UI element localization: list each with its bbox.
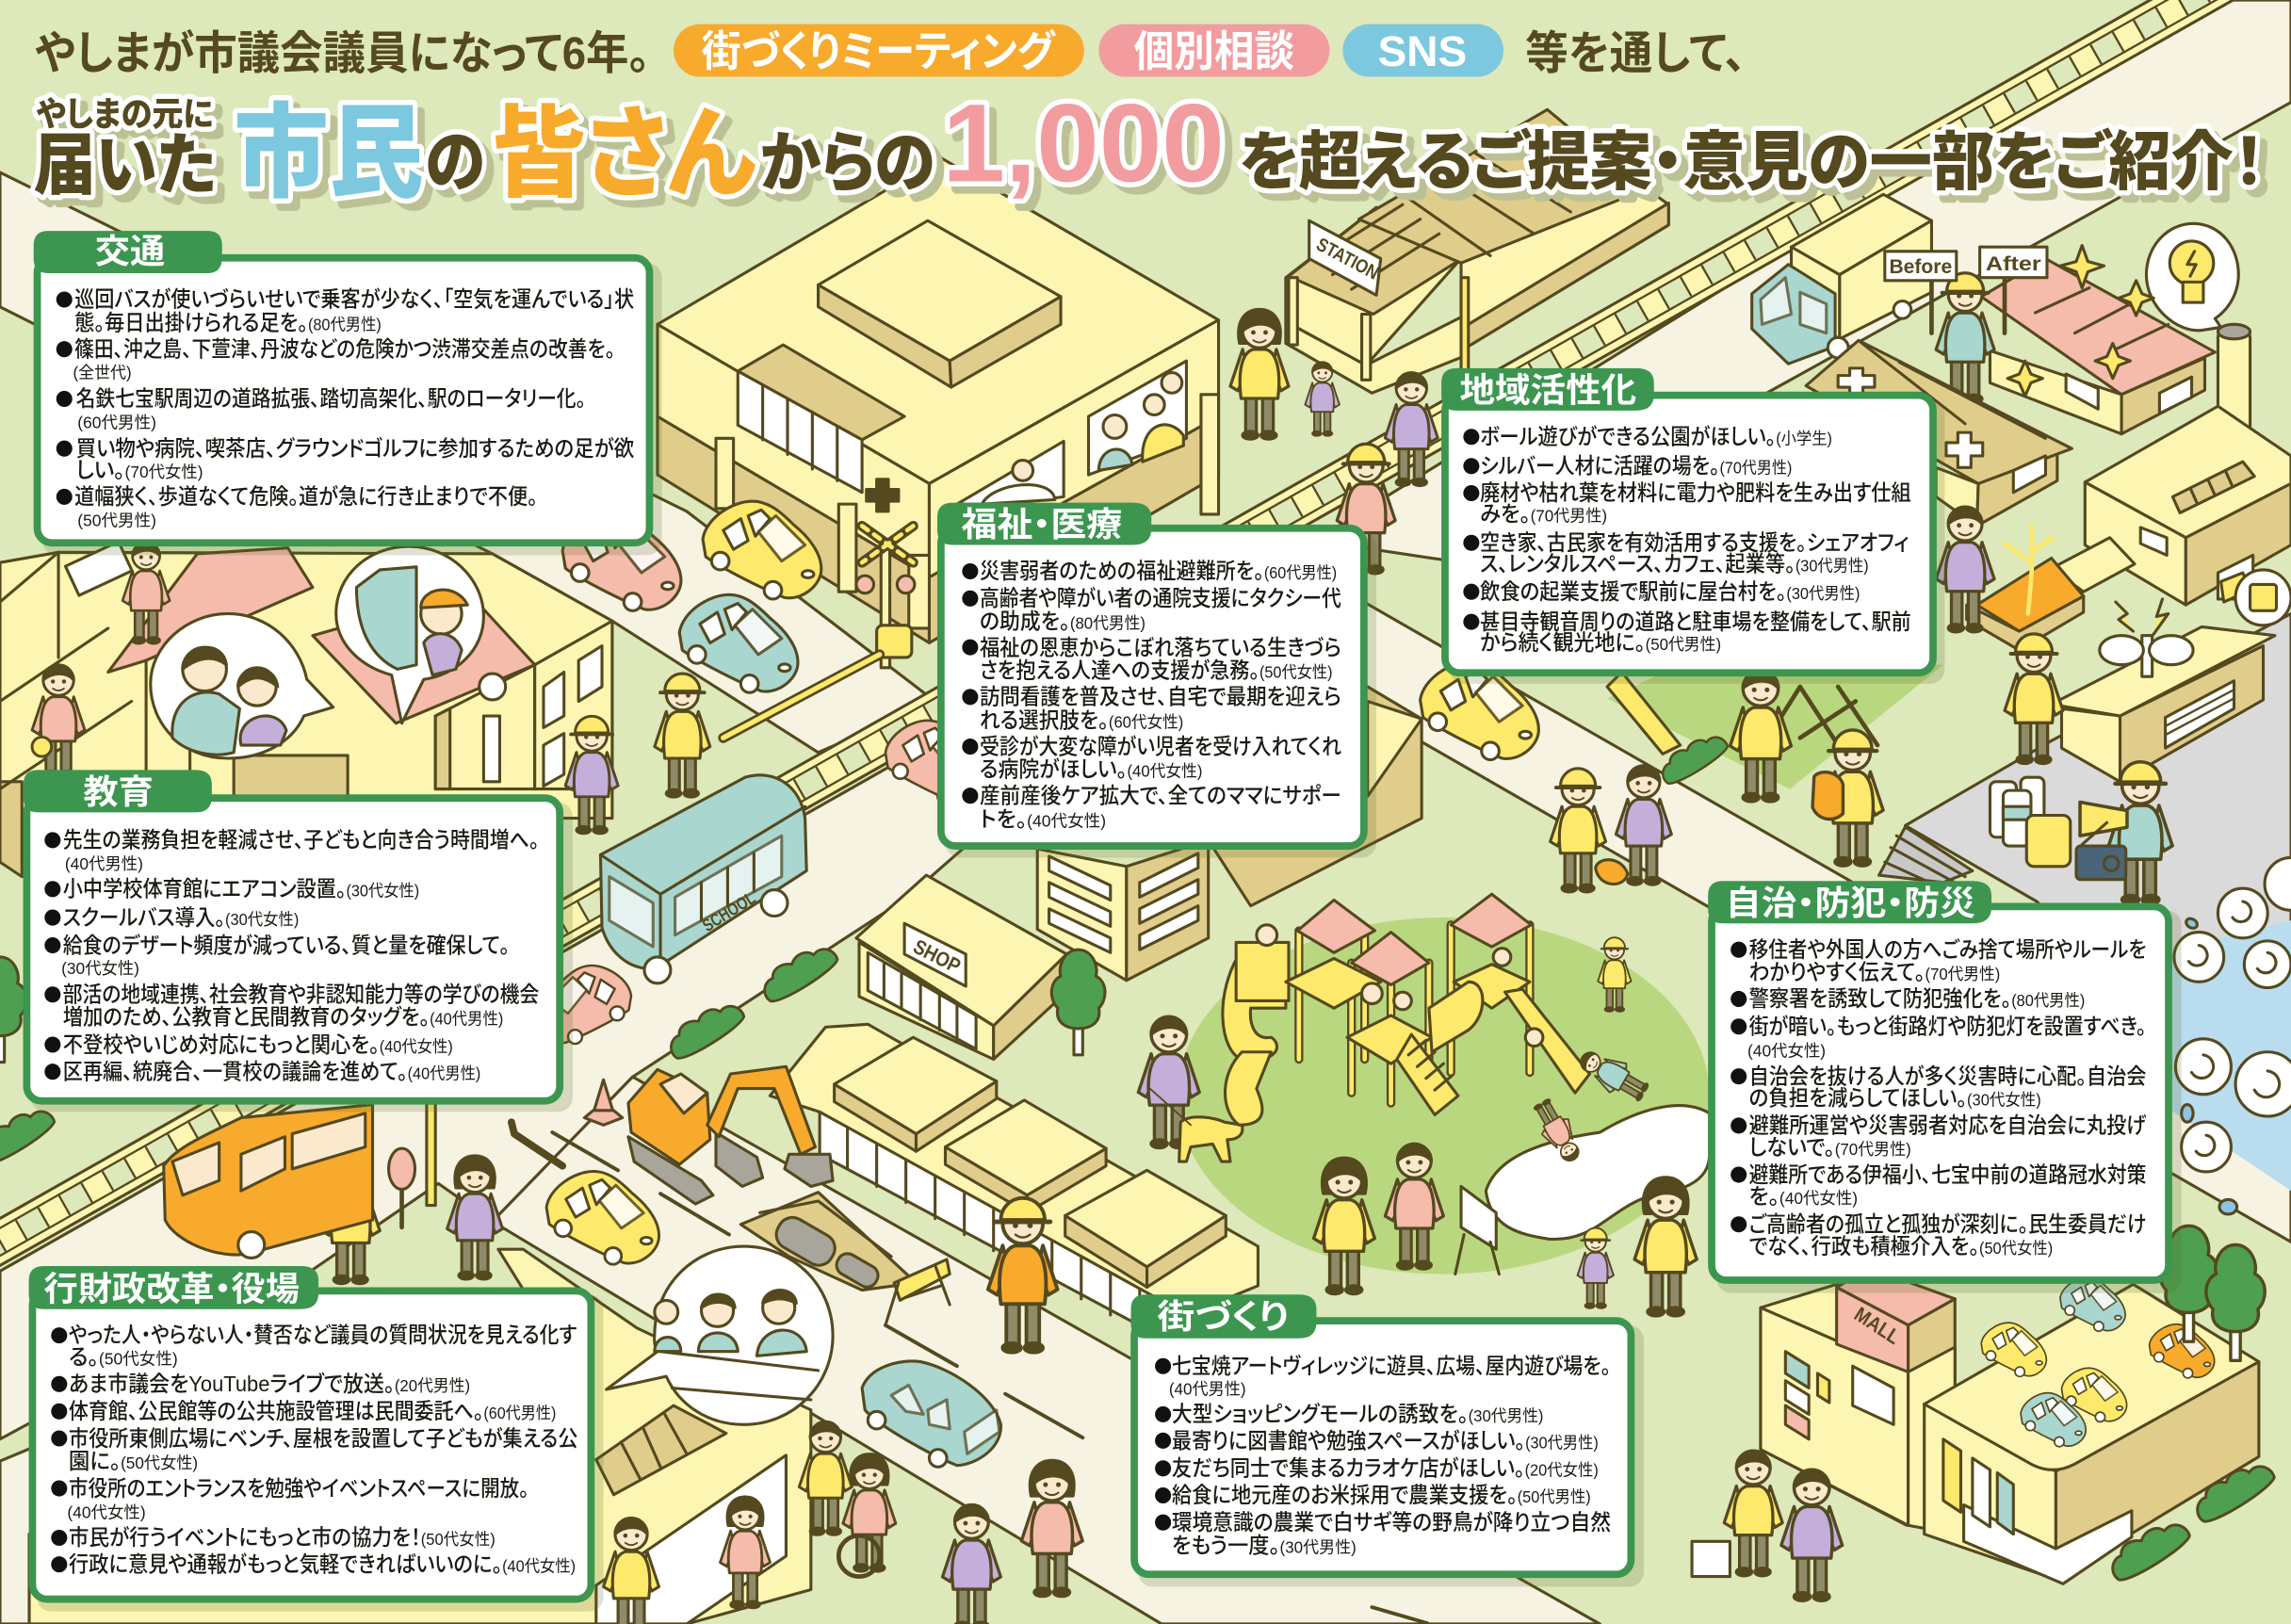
car: pink at crossing (886, 721, 986, 804)
park: dark green lawn upper (1607, 665, 1943, 789)
heading: 自治・防犯・防災: 自治・防犯・防災 (1726, 885, 1975, 922)
pill: SNS (1342, 24, 1503, 76)
tree left edge (0, 957, 26, 1063)
person: woman with child near station (1230, 310, 1289, 439)
emergency backpack (2026, 815, 2071, 867)
text block: 自治・防犯・防災の意見: 警察署を誘致して防犯強化を。(80代男性) (1749, 986, 2085, 1011)
panel: 街づくり (1130, 1294, 1644, 1586)
text block: 交通の意見: 態。毎日出掛けられる足を。(80代男性) (74, 311, 382, 335)
person: child sliding (1528, 1096, 1587, 1167)
text block: 街づくりの意見: 最寄りに図書館や勉強スペースがほしい。(30代男性) (1172, 1429, 1599, 1453)
title: の (425, 125, 485, 201)
building: main clinic block (658, 158, 1219, 642)
building: clinic with tan roof (1806, 340, 2072, 526)
title: 1,000 (942, 80, 1225, 204)
building: school (0, 542, 612, 877)
stairs (1879, 827, 1973, 885)
playground (1223, 894, 1590, 1125)
header line (35, 24, 1746, 79)
text block: 交通の意見: 巡回バスが使いづらいせいで乗客が少なく、「空気を運んでいる」状 (74, 287, 634, 312)
text block: 地域活性化の意見: ス、レンタルスペース、カフェ、起業等。(30代男性) (1480, 551, 1869, 576)
text block: 自治・防犯・防災の意見: 移住者や外国人の方へごみ捨て場所やルールを (1749, 937, 2146, 962)
text block: 街づくりの意見: (40代男性) (1169, 1379, 1246, 1398)
building: storage shed (2052, 626, 2275, 782)
sparkles (2007, 246, 2153, 396)
person: man greeting (942, 1504, 1000, 1624)
person: man in yellow behind wheelchair (799, 1421, 852, 1535)
panel: 交通 (34, 231, 662, 555)
text block: 教育の意見 (44, 828, 539, 1083)
person: basketball player (32, 665, 85, 778)
text block: 福祉・医療の意見: れる選択肢を。(60代女性) (980, 707, 1183, 732)
text block: 地域活性化の意見 (1463, 425, 1911, 655)
text block: 地域活性化の意見: から続く観光地に。(50代男性) (1480, 630, 1721, 655)
text block: 教育の意見: 増加のため、公教育と民間教育のタッグを。(40代男性) (63, 1004, 503, 1029)
person: elder in wheelchair (838, 1454, 896, 1577)
text block: 地域活性化の意見: シルバー人材に活躍の場を。(70代男性) (1480, 454, 1792, 479)
text block: 教育の意見: 給食のデザート頻度が減っている、質と量を確保して。 (63, 933, 510, 957)
traffic cone (584, 1080, 623, 1125)
hedge by mall lower (2104, 1514, 2194, 1584)
text block: 自治・防犯・防災の意見: でなく、行政も積極介入を。(50代女性) (1749, 1234, 2053, 1259)
river and waves (2171, 857, 2291, 1214)
text block: 自治・防犯・防災の意見: 避難所運営や災害弱者対応を自治会に丸投げ (1749, 1113, 2146, 1138)
speech bubble: teacher and student (151, 613, 333, 758)
text block: 地域活性化の意見: 空き家、古民家を有効活用する支援を。シェアオフィ (1480, 530, 1909, 555)
emergency bottles (1990, 777, 2044, 846)
white plaza blob (1486, 1106, 1710, 1240)
road: lower diagonal road (493, 1077, 1600, 1624)
text block: 街づくりの意見: 給食に地元産のお米採用で農業支援を。(50代男性) (1172, 1483, 1591, 1507)
level crossing signal (723, 526, 915, 738)
person: boy waving on crossing (1385, 373, 1438, 486)
text block: 行財政改革・役場の意見: (40代女性) (67, 1503, 146, 1522)
building: SHOP (856, 875, 1066, 1060)
compost box and pipe (1967, 526, 2135, 650)
text block: 街づくりの意見: 環境意識の農業で白サギ等の野鳥が降り立つ自然 (1172, 1510, 1611, 1535)
text block: 教育の意見: 部活の地域連携、社会教育や非認知能力等の学びの機会 (63, 983, 539, 1007)
dog (1150, 1089, 1243, 1161)
panel: 地域活性化 (1441, 368, 1944, 684)
heading: 地域活性化: 地域活性化 (1459, 372, 1636, 410)
heading: 交通 (34, 231, 222, 273)
title (34, 80, 2265, 211)
text block: 地域活性化の意見: 甚目寺観音周りの道路と駐車場を整備をして、駅前 (1480, 609, 1911, 634)
person: evacuee with orange pack (1812, 730, 1883, 866)
building: apartments (1037, 840, 1209, 981)
icon: light bulb speech bubble (2146, 223, 2238, 331)
person: shopper with bag (1781, 1470, 1843, 1600)
person: child running in park (1598, 937, 1632, 1012)
tree second (2206, 1244, 2265, 1360)
pill: 個別相談: 個別相談 (1134, 27, 1294, 75)
text block: 交通の意見: 篠田、沖之島、下萱津、丹波などの危険かつ渋滞交差点の改善を。 (74, 336, 615, 361)
text block: 交通の意見: 道幅狭く、歩道なくて危険。道が急に行き止まりで不便。 (74, 484, 538, 509)
sign: STATION (1309, 220, 1382, 295)
sign: SHOP: SHOP (910, 934, 965, 978)
pill: 個別相談 (1098, 24, 1329, 76)
text block: 福祉・医療の意見: 産前産後ケア拡大で、全てのママにサポー (980, 783, 1341, 807)
school bus (600, 775, 806, 983)
text block: 福祉・医療の意見: る病院がほしい。(40代女性) (980, 757, 1202, 782)
person: man planting (1936, 507, 1994, 632)
text block: 交通の意見: 名鉄七宝駅周辺の道路拡張、踏切高架化、駅のロータリー化。 (76, 386, 586, 411)
text block: 福祉・医療の意見: 訪問看護を普及させ、自宅で最期を迎えら (980, 685, 1341, 709)
person: man with megaphone (2080, 762, 2172, 903)
easel (1455, 1186, 1499, 1275)
building: pink roof workshop (1981, 259, 2215, 434)
text block: 自治・防犯・防災の意見: 避難所である伊福小、七宝中前の道路冠水対策 (1749, 1162, 2146, 1187)
text block: 交通の意見: (全世代) (73, 364, 132, 382)
text block: 教育の意見: スクールバス導入。(30代女性) (63, 905, 299, 930)
heading: 街づくり: 街づくり (1157, 1298, 1289, 1336)
car: yellow road (546, 1171, 659, 1264)
cars on mall roof (1981, 1277, 2215, 1447)
heading: 教育 (24, 770, 212, 812)
sign: SHOP (904, 923, 966, 986)
text block: 交通の意見: 買い物や病院、喫茶店、グラウンドゴルフに参加するための足が欲 (76, 436, 634, 461)
person: woman with phone (447, 1156, 503, 1279)
person: mother (1634, 1177, 1697, 1316)
road: lower-left road along railway (0, 740, 1023, 1439)
text block: 教育の意見: 先生の業務負担を軽減させ、子どもと向き合う時間増へ。 (63, 828, 539, 853)
text block: 教育の意見: (30代女性) (61, 959, 139, 978)
people in clinic window (982, 373, 1183, 504)
sign: Before: Before (1889, 254, 1952, 278)
persons: schoolchildren (565, 716, 618, 834)
car: yellow right (1421, 662, 1538, 760)
person: police officer (1616, 766, 1671, 885)
text block: 行財政改革・役場の意見 (51, 1323, 577, 1576)
text block: 教育の意見: 不登校やいじめ対応にもっと関心を。(40代女性) (63, 1032, 453, 1057)
excavated pit with pipes (740, 1193, 916, 1291)
person: worker with Before After signs (1885, 247, 2047, 402)
hedge near lot (1655, 728, 1731, 788)
panel: 行財政改革・役場 (29, 1266, 604, 1612)
hedge left (0, 1101, 58, 1168)
sign: After: After (1986, 252, 2041, 275)
text block: 福祉・医療の意見: 高齢者や障がい者の通院支援にタクシー代 (980, 586, 1341, 610)
person: schoolchild yellow (655, 674, 710, 797)
person: care worker (1021, 1460, 1082, 1597)
school bus: SCHOOL (699, 887, 758, 935)
text block: 行財政改革・役場の意見: 市民が行うイベントにもっと市の協力を！(50代女性) (69, 1525, 496, 1550)
text block: 行財政改革・役場の意見: 園に。(50代女性) (69, 1449, 198, 1473)
pill: 街づくりミーティング: 街づくりミーティング (701, 27, 1056, 75)
playground equipment in lot (1607, 672, 1877, 754)
trees by mall (2159, 1226, 2218, 1341)
person: shopper with cart (1724, 1451, 1782, 1576)
road: lower-left corner strip (0, 1424, 88, 1624)
person: photographer (1314, 1158, 1374, 1294)
person: worker pushing cart (1337, 444, 1395, 574)
hedge second (663, 996, 748, 1063)
text block: 自治・防犯・防災の意見: を。(40代女性) (1749, 1184, 1858, 1209)
person: elderly man (321, 1159, 380, 1284)
person: painter (1385, 1144, 1443, 1269)
text block: 地域活性化の意見: 廃材や枯れ葉を材料に電力や肥料を生み出す仕組 (1480, 480, 1911, 505)
text block: 福祉・医療の意見 (962, 559, 1341, 831)
icon: fertilizer bubble (2235, 570, 2291, 625)
text block: 自治・防犯・防災の意見: 街が暗い。もっと街路灯や防犯灯を設置すべき。 (1749, 1015, 2146, 1039)
text block: 街づくりの意見: 友だち同士で集まるカラオケ店がほしい。(20代女性) (1172, 1456, 1599, 1481)
building: town hall (29, 1249, 811, 1624)
text block: 教育の意見: 小中学校体育館にエアコン設置。(30代女性) (63, 877, 419, 901)
excavator (628, 1066, 833, 1204)
evacuation plaza (1906, 613, 2291, 1169)
children on playground (1257, 925, 1543, 1047)
car: pink (562, 512, 681, 610)
ladder (1397, 1034, 1458, 1114)
people in town hall window (604, 1497, 771, 1624)
speech bubble: child at door (336, 546, 483, 723)
road markings (552, 1132, 1427, 1623)
panel: 福祉・医療 (937, 503, 1376, 857)
text block: 自治・防犯・防災の意見: わかりやすく伝えて。(70代男性) (1749, 960, 2000, 984)
heading: 教育: 教育 (83, 773, 154, 811)
text block: 行財政改革・役場の意見: やった人・やらない人・賛否など議員の質問状況を見える化す (69, 1323, 577, 1347)
building: factory (2085, 406, 2291, 605)
text block: 街づくりの意見: 大型ショッピングモールの誘致を。(30代男性) (1172, 1402, 1543, 1426)
text block: 行財政改革・役場の意見: る。(50代女性) (69, 1345, 178, 1370)
text block: 福祉・医療の意見: 受診が大変な障がい児者を受け入れてくれ (980, 734, 1341, 758)
panel: 教育 (24, 770, 573, 1112)
title: 市民 (234, 97, 424, 211)
heading: 福祉・医療 (937, 503, 1151, 545)
pill: SNS: SNS (1378, 27, 1467, 75)
building: station (1286, 109, 1668, 409)
road arrow (512, 1122, 562, 1166)
text block: 自治・防犯・防災の意見 (1730, 937, 2146, 1259)
person: worker with pruning shears (1730, 671, 1791, 802)
hedges by shop (756, 939, 841, 1006)
car: pink lower (536, 966, 631, 1044)
text block: 地域活性化の意見: みを。(70代男性) (1480, 502, 1607, 527)
person: man walking dog (1138, 1016, 1199, 1147)
spiral slide (1223, 950, 1286, 1060)
chimney (2218, 324, 2250, 443)
bus stop sign (389, 1103, 435, 1227)
text block: 街づくりの意見 (1155, 1354, 1611, 1557)
park: main round lawn (1178, 918, 1710, 1275)
tree by shop (1051, 950, 1105, 1055)
car: yellow with driver (703, 501, 821, 599)
text block: 行財政改革・役場の意見: 市役所のエントランスを勉強やイベントスペースに開放。 (69, 1476, 528, 1501)
title: を超えるご提案・意見の一部をご紹介！ (1239, 126, 2265, 198)
hedge by mall (2188, 1455, 2279, 1526)
text block: 交通の意見 (57, 287, 634, 529)
teal van (862, 1361, 1001, 1467)
title: からの (760, 126, 935, 200)
text block: 街づくりの意見: 七宝焼アートヴィレッジに遊具、広場、屋内遊び場を。 (1172, 1354, 1611, 1378)
icon: loudspeakers on shed (2100, 599, 2193, 676)
building: shopping row (770, 1024, 1258, 1341)
sign: STATION: STATION (1313, 235, 1382, 284)
text block: 福祉・医療の意見: 福祉の恩恵からこぼれ落ちている生きづら (980, 635, 1341, 659)
text block: 自治・防犯・防災の意見: の負担を減らしてほしい。(30代女性) (1749, 1086, 2041, 1111)
text block: 自治・防犯・防災の意見: ご高齢者の孤立と孤独が深刻に。民生委員だけ (1749, 1212, 2146, 1237)
text block: 福祉・医療の意見: トを。(40代女性) (980, 806, 1106, 831)
text block: 教育の意見: 区再編、統廃合、一貫校の議論を進めて。(40代男性) (63, 1059, 480, 1083)
text block: 自治・防犯・防災の意見: 自治会を抜ける人が多く災害時に心配。自治会 (1749, 1064, 2146, 1088)
heading: 行財政改革・役場: 行財政改革・役場 (44, 1270, 300, 1307)
person: child near station (1305, 362, 1340, 436)
sign: After (1980, 247, 2047, 278)
text block: 教育の意見: (40代男性) (65, 854, 143, 873)
speech bubble: council meeting (607, 1246, 833, 1424)
text: intro: やしまが市議会議員になって6年。 (35, 28, 650, 79)
text block: 福祉・医療の意見: の助成を。(80代男性) (980, 609, 1146, 634)
MALL building (1761, 1268, 2259, 1583)
text block: 街づくりの意見: をもう一度。(30代男性) (1172, 1533, 1357, 1557)
person: child with mother (1578, 1227, 1614, 1308)
text block: 地域活性化の意見: 飲食の起業支援で駅前に屋台村を。(30代男性) (1480, 579, 1860, 604)
text block: 福祉・医療の意見: 災害弱者のための福祉避難所を。(60代男性) (980, 559, 1337, 583)
building: apartments back block (1209, 687, 1422, 906)
person: evacuee running (2005, 634, 2063, 763)
play towers (1286, 894, 1531, 1103)
text: 等を通して: 等を通して、 (1525, 28, 1746, 79)
straight slide (1505, 989, 1590, 1093)
person: kneeling volunteer (1551, 769, 1628, 892)
heading: 福祉・医療: 福祉・医療 (962, 506, 1122, 544)
car: teal (679, 594, 798, 692)
title: 届いた (34, 128, 217, 203)
road: upper-left diagonal road (0, 172, 935, 753)
person: athlete on roof (122, 543, 170, 643)
text block: 地域活性化の意見: ボール遊びができる公園がほしい。(小学生) (1480, 425, 1832, 449)
text block: 交通の意見: (50代男性) (77, 511, 156, 529)
shopping cart (1692, 1541, 1730, 1577)
text block: 交通の意見: しい。(70代女性) (76, 458, 203, 482)
title: やしまの元に (36, 95, 213, 133)
text block: 福祉・医療の意見: さを抱える人達への支援が急務。(50代女性) (980, 658, 1333, 683)
orange bus (164, 1105, 373, 1258)
railway (0, 0, 2235, 1267)
emergency radio (2076, 822, 2126, 880)
MALL building: MALL (1850, 1302, 1905, 1349)
person: child jumping (1574, 1043, 1652, 1108)
text block: 交通の意見: (60代男性) (77, 413, 156, 431)
heading: 街づくり (1130, 1294, 1316, 1339)
road: strip beside railway upper right (1315, 0, 2291, 562)
text block: 行財政改革・役場の意見: 市役所東側広場にベンチ、屋根を設置して子どもが集える公 (69, 1426, 577, 1451)
text block: 行財政改革・役場の意見: あま市議会をYouTubeライブで放送。(20代男性) (69, 1372, 470, 1396)
truck (1752, 194, 1931, 364)
text block: 行財政改革・役場の意見: 体育館、公民館等の公共施設管理は民間委託へ。(60代男性) (69, 1399, 556, 1423)
text block: 自治・防犯・防災の意見: しないで。(70代男性) (1749, 1135, 1911, 1160)
title: 皆さん (493, 100, 756, 210)
text block: 行財政改革・役場の意見: 行政に意見や通報がもっと気軽できればいいのに。(40代女性) (69, 1551, 576, 1576)
heading: 交通: 交通 (95, 233, 166, 270)
road: centre-right diagonal road (1358, 599, 2291, 1242)
text block: 自治・防犯・防災の意見: (40代女性) (1747, 1041, 1826, 1060)
person: traffic guard (988, 1198, 1058, 1353)
road barrier (886, 1259, 950, 1325)
panel: 自治・防犯・防災 (1708, 881, 2182, 1293)
